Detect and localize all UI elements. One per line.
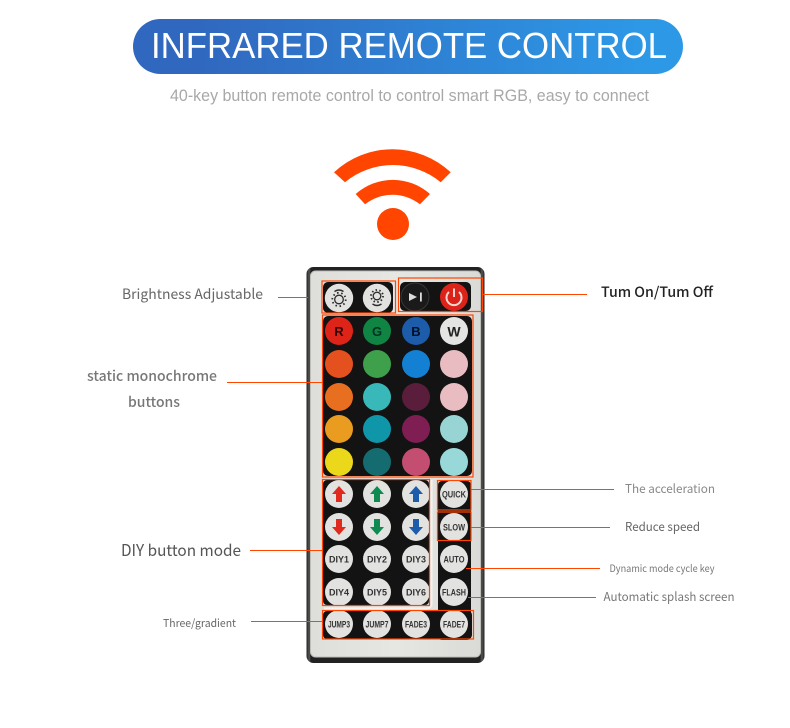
play pause icon (409, 293, 417, 301)
brightness up icon (332, 290, 346, 306)
colour buttons: G (372, 324, 382, 339)
label: Brightness Adjustable: Brightness Adjustable (122, 284, 263, 304)
remote body (306, 267, 484, 663)
brightness down icon (371, 290, 383, 306)
button labels: JUMP3 (328, 620, 350, 630)
button labels: DIY4 (329, 588, 349, 598)
colour buttons: B (411, 324, 421, 339)
black button panels (323, 282, 472, 640)
arrow buttons (332, 486, 423, 535)
DIY and function buttons (325, 480, 468, 638)
button labels: DIY5 (367, 588, 387, 598)
label: Reduce speed: Reduce speed (625, 518, 700, 535)
label: Three/gradient: Three/gradient (163, 615, 236, 631)
button labels: AUTO (444, 554, 464, 564)
button labels: DIY2 (367, 554, 387, 564)
button labels: FADE3 (405, 620, 427, 630)
remote control (306, 267, 484, 663)
label: static monochrome buttons: static monochrome (87, 366, 217, 386)
button labels: DIY3 (406, 554, 426, 564)
title text: INFRARED REMOTE CONTROL (151, 25, 667, 66)
colour buttons: R (334, 324, 344, 339)
button labels: FLASH (442, 588, 466, 598)
button labels: SLOW (443, 522, 465, 532)
label: static monochrome buttons (87, 366, 217, 412)
button labels (328, 490, 466, 630)
title pill (133, 19, 683, 74)
label: The acceleration: The acceleration (625, 480, 715, 497)
button labels: JUMP7 (366, 620, 388, 630)
subtitle: 40-key button remote control to control smart RGB, easy to connect (170, 87, 649, 105)
button labels: DIY1 (329, 554, 349, 564)
button labels: QUICK (442, 490, 466, 500)
label: DIY button mode: DIY button mode (121, 537, 241, 561)
title (133, 19, 683, 74)
button labels: DIY6 (406, 588, 426, 598)
colour buttons: W (447, 324, 461, 340)
colour buttons (325, 317, 468, 476)
label: static monochrome buttons: buttons (128, 392, 180, 412)
callout lines (227, 294, 614, 622)
orange highlight boxes (322, 278, 482, 639)
label: Automatic splash screen: Automatic splash screen (604, 588, 734, 605)
icon: wifi signal (334, 149, 451, 240)
power icon (447, 288, 462, 305)
label: Dynamic mode cycle key: Dynamic mode cycle key (610, 560, 715, 575)
brightness and power buttons (325, 283, 468, 312)
button labels: FADE7 (443, 620, 465, 630)
label: Tum On/Tum Off: Tum On/Tum Off (601, 282, 714, 302)
